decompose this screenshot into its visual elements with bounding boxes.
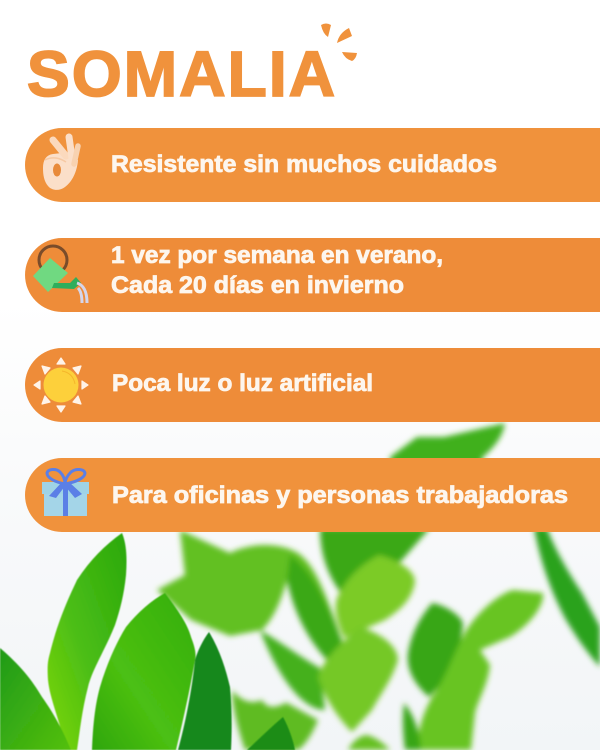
plant photo	[0, 423, 600, 750]
icon: OK hand	[43, 137, 78, 190]
panel: watering	[25, 238, 600, 312]
sharp foreground leaves	[0, 533, 295, 750]
panel: light	[25, 348, 600, 422]
accent sparks	[321, 24, 357, 61]
panel: offices	[25, 458, 600, 532]
panel: watering: Cada 20 días en invierno	[111, 272, 404, 299]
blurred background leaves	[157, 423, 600, 750]
text: Poca luz o luz artificial	[112, 370, 373, 397]
icon: sun	[34, 358, 88, 412]
icon: gift	[42, 469, 89, 516]
text: 1 vez por semana en verano,	[111, 242, 443, 269]
title: SOMALIA	[27, 38, 335, 110]
text: Resistente sin muchos cuidados	[111, 151, 497, 178]
icon: watering can	[33, 246, 87, 303]
text: Para oficinas y personas trabajadoras	[112, 482, 568, 509]
panel: resistant	[25, 128, 600, 202]
